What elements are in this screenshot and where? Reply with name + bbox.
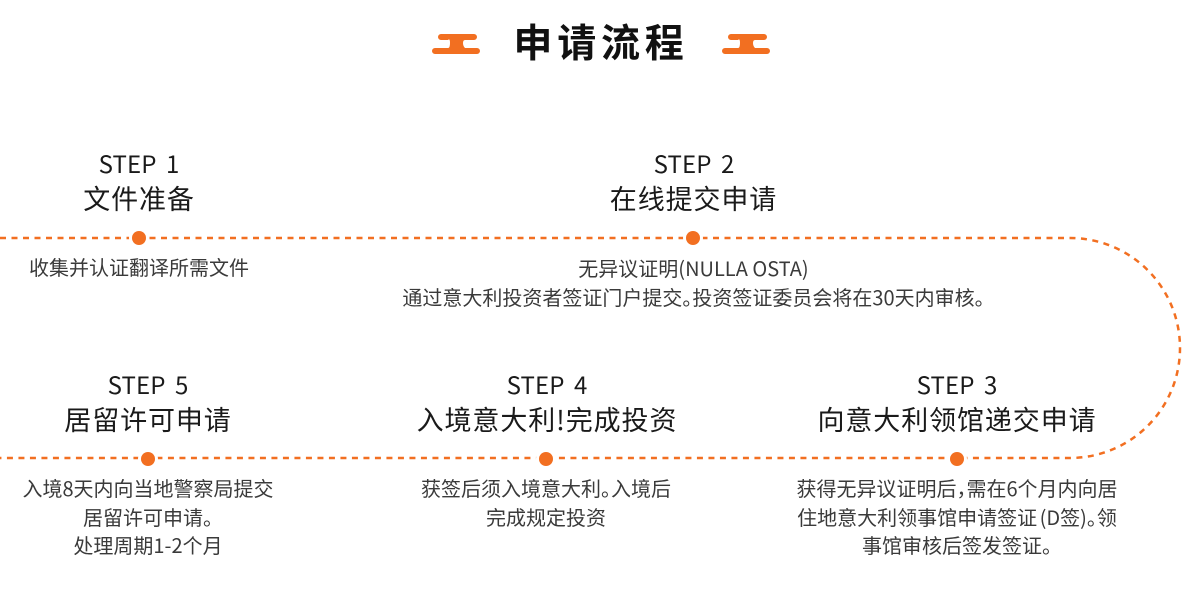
step 2 heading: 在线提交申请	[610, 178, 777, 217]
step 2 description: 无异议证明(NULLA OSTA)	[578, 253, 809, 282]
step 2 label: STEP 2	[654, 145, 734, 180]
icon: right title ornament	[722, 34, 770, 54]
icon: left title ornament	[432, 34, 480, 54]
step 1 marker	[132, 231, 146, 245]
step 4 description	[421, 473, 671, 531]
step 3	[796, 366, 1118, 559]
step 2	[402, 145, 985, 311]
step 5 description: 居留许可申请。	[83, 502, 213, 531]
step 4 label: STEP 4	[507, 366, 587, 401]
step 3 label: STEP 3	[917, 366, 997, 401]
step 2 marker	[686, 231, 700, 245]
step 3 description: 住地意大利领事馆申请签证 (D签)。领	[797, 502, 1117, 531]
step 5 description: 处理周期1-2个月	[73, 530, 223, 559]
step 4	[417, 366, 677, 531]
step 5	[22, 366, 274, 559]
step 3 description: 获得无异议证明后，需在6个月内向居	[796, 473, 1118, 502]
step 3 heading: 向意大利领馆递交申请	[818, 399, 1096, 438]
step 5 heading: 居留许可申请	[64, 399, 232, 438]
title: 申请流程	[513, 13, 689, 69]
step 5 label: STEP 5	[108, 366, 188, 401]
step 4 description: 完成规定投资	[486, 502, 606, 531]
step 4 description: 获签后须入境意大利。入境后	[421, 473, 671, 502]
step 1 label: STEP 1	[99, 145, 179, 180]
step 2 description	[402, 253, 985, 311]
step 3 description	[796, 473, 1118, 559]
step 3 marker	[950, 452, 964, 466]
step 1 description: 收集并认证翻译所需文件	[29, 252, 249, 281]
step 2 description: 通过意大利投资者签证门户提交。投资签证委员会将在30天内审核。	[402, 282, 985, 311]
step 4 marker	[539, 452, 553, 466]
step 3 description: 事馆审核后签发签证。	[862, 530, 1052, 559]
step 5 marker	[141, 452, 155, 466]
step 1 heading: 文件准备	[83, 178, 195, 217]
step 1	[29, 145, 249, 281]
step 5 description: 入境8天内向当地警察局提交	[22, 473, 274, 502]
step 4 heading: 入境意大利!完成投资	[417, 399, 677, 438]
step 5 description	[22, 473, 274, 559]
